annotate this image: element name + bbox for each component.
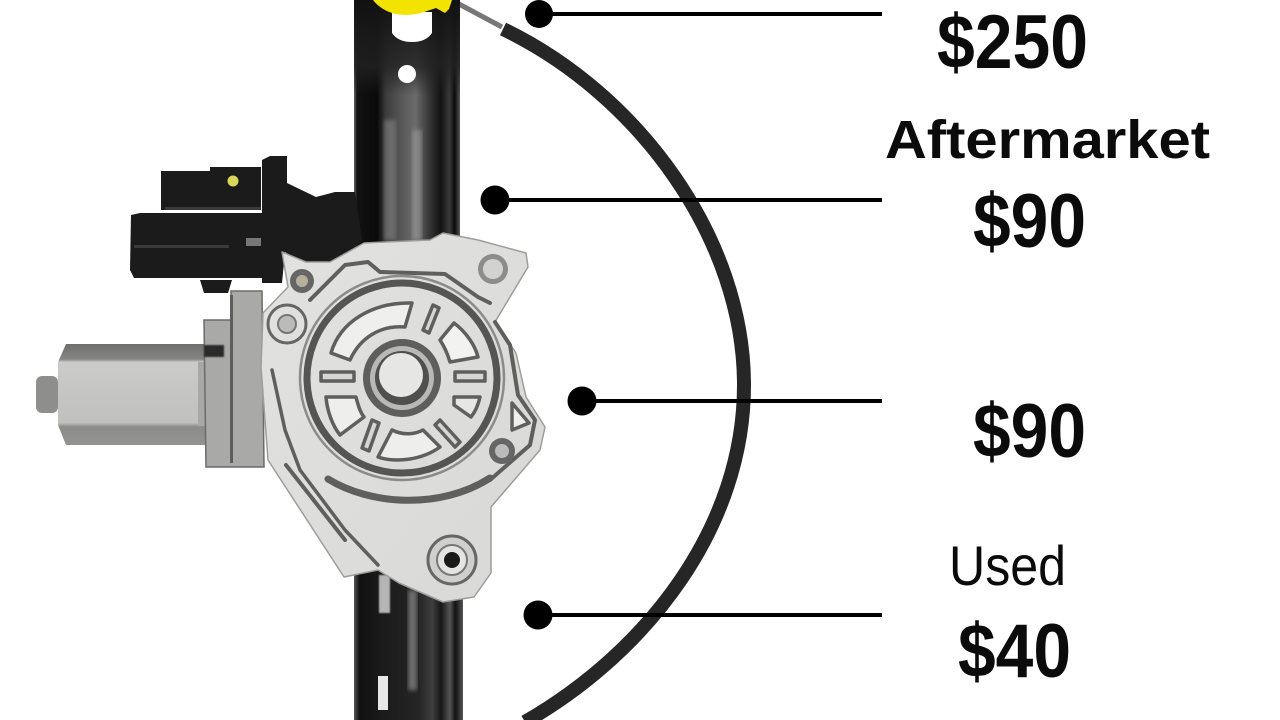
callout: aftermarket price: Aftermarket (885, 110, 1210, 170)
callout: used price: Used (949, 534, 1066, 597)
window cut-outs (331, 303, 412, 360)
icon: connector pin (228, 176, 238, 186)
gear ring (307, 283, 497, 473)
screw bosses (268, 254, 515, 584)
icon: yellow clip (373, 0, 452, 15)
callout: middle price: $90 (973, 389, 1086, 474)
motor assembly (36, 291, 264, 467)
motor body (58, 344, 222, 445)
central hub (363, 339, 441, 417)
icon: rail slot (392, 12, 432, 42)
aluminium gear plate (261, 233, 545, 602)
callout: aftermarket price (480, 110, 1210, 264)
callout: used price: $40 (958, 609, 1071, 694)
callout: top price (525, 0, 1088, 85)
callout: aftermarket price: $90 (973, 179, 1086, 264)
icon: rail hole (398, 65, 416, 83)
callout: middle price (568, 386, 1086, 474)
motor nut (36, 376, 58, 413)
callout: used price (524, 534, 1071, 694)
embossed channels (310, 262, 490, 303)
cable (457, 3, 744, 720)
gear block (204, 291, 264, 467)
connector housing (130, 156, 362, 293)
vertical rail (354, 0, 463, 720)
callout: top price: $250 (937, 0, 1088, 85)
